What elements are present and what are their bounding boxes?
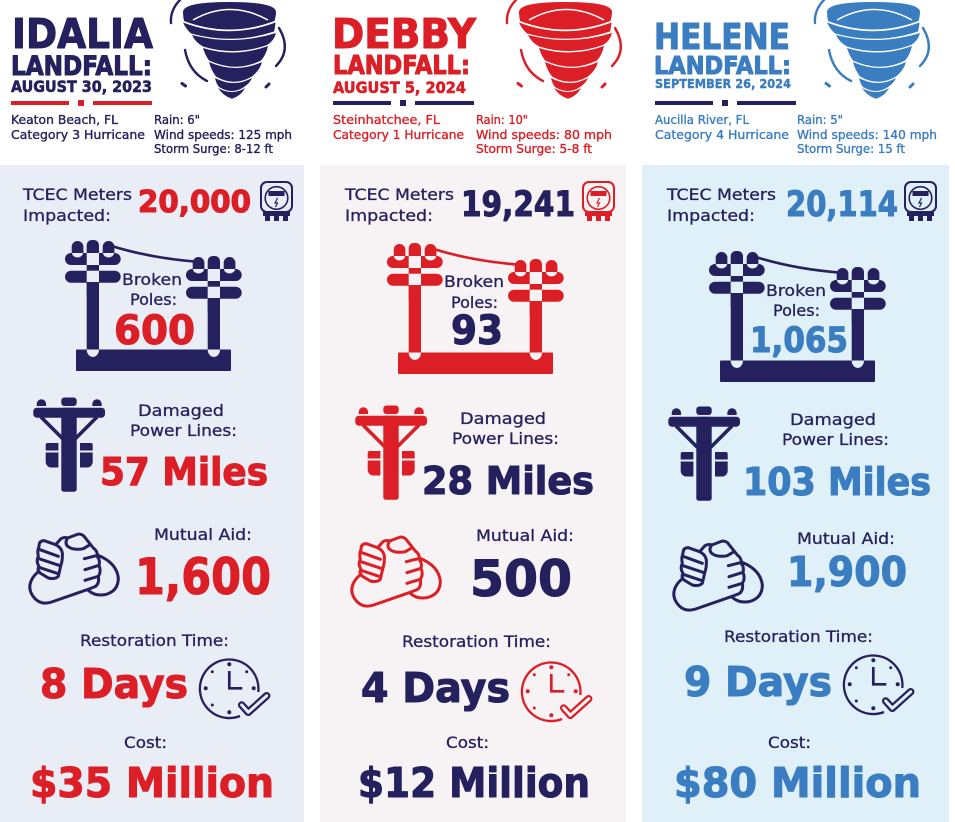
stat: meters impacted: TCEC Meters — [666, 185, 776, 204]
text: storm details: Category 1 Hurricane — [333, 128, 464, 142]
stat: cost: $35 Million — [30, 759, 274, 807]
heading: Idalia landfall: IDALIA — [12, 10, 153, 58]
stat: broken poles: Poles: — [451, 293, 498, 312]
text: storm details: Steinhatchee, FL — [333, 113, 440, 127]
text: storm details: Rain: 5" — [797, 113, 843, 127]
stat: broken poles — [444, 272, 504, 354]
stat: mutual aid — [787, 529, 907, 596]
text: storm details: Rain: 6" — [154, 113, 200, 127]
stat: meters impacted: TCEC Meters — [22, 185, 132, 204]
text: storm details: Storm Surge: 5-8 ft — [476, 142, 592, 156]
icon: tornado — [815, 0, 929, 99]
icon: clock — [522, 662, 589, 721]
stat: damaged power lines: Damaged — [138, 401, 224, 420]
text: storm details: Storm Surge: 8-12 ft — [154, 142, 273, 156]
stat: meters impacted: Impacted: — [23, 206, 111, 225]
icon: tornado — [507, 0, 621, 99]
icon: utility poles — [387, 243, 564, 374]
stat: restoration time — [684, 627, 873, 706]
stat: broken poles: 1,065 — [750, 321, 848, 361]
stat: meters impacted — [344, 185, 575, 225]
text: storm details — [333, 113, 612, 156]
text: storm details: Aucilla River, FL — [655, 113, 749, 127]
text: storm details: Rain: 10" — [476, 113, 528, 127]
icon: power line pole — [355, 406, 427, 500]
stat: restoration time: Restoration Time: — [80, 631, 229, 650]
divider rule — [333, 100, 474, 106]
stat: cost — [358, 733, 590, 807]
stat: mutual aid: 500 — [470, 550, 572, 608]
stat: broken poles — [750, 281, 848, 361]
stat: mutual aid: 1,900 — [787, 548, 907, 596]
heading: Idalia landfall: AUGUST 30, 2023 — [11, 77, 152, 96]
heading: Idalia landfall — [11, 10, 153, 96]
stat: broken poles: 93 — [451, 308, 503, 354]
stat: cost: Cost: — [124, 733, 167, 752]
stat: damaged power lines: Damaged — [790, 410, 876, 429]
column: Idalia — [0, 0, 304, 822]
column: Helene — [642, 0, 949, 822]
stat: meters impacted: Impacted: — [345, 206, 433, 225]
stat: meters impacted: Impacted: — [667, 206, 755, 225]
column: Debby — [320, 0, 626, 822]
icon: clock — [844, 655, 911, 714]
stat: meters impacted: TCEC Meters — [344, 185, 454, 204]
text: storm details: Wind speeds: 80 mph — [476, 128, 612, 142]
text: storm details: Wind speeds: 125 mph — [154, 128, 292, 142]
heading: Debby landfall — [332, 10, 477, 97]
heading: Helene landfall: SEPTEMBER 26, 2024 — [655, 76, 791, 91]
stat: broken poles: Broken — [122, 270, 182, 289]
icon: meter — [905, 182, 936, 221]
stat: damaged power lines: 103 Miles — [743, 460, 931, 504]
stat: broken poles: Poles: — [130, 290, 177, 309]
panel: Helene stats background — [642, 165, 949, 822]
stat: damaged power lines — [422, 409, 594, 503]
stat: broken poles: Broken — [444, 272, 504, 291]
stat: mutual aid: 1,600 — [135, 548, 271, 606]
panel: Debby stats background — [320, 165, 626, 822]
stat: cost — [674, 733, 921, 807]
stat: mutual aid: Mutual Aid: — [476, 526, 574, 545]
stat: cost: Cost: — [446, 733, 489, 752]
icon: power line pole — [668, 406, 740, 501]
icon: clock — [200, 659, 267, 718]
stat: damaged power lines — [100, 401, 268, 494]
divider rule — [11, 100, 152, 106]
text: storm details: Wind speeds: 140 mph — [797, 128, 937, 142]
stat: damaged power lines: Power Lines: — [782, 430, 889, 449]
stat: meters impacted: 20,114 — [786, 185, 898, 225]
heading: Helene landfall: LANDFALL: — [654, 51, 791, 80]
stat: cost: $80 Million — [674, 759, 921, 807]
stat: restoration time — [40, 631, 229, 708]
text: storm details — [655, 113, 937, 156]
divider rule — [655, 100, 796, 106]
heading: Helene landfall: HELENE — [654, 17, 790, 58]
stat: broken poles: Broken — [766, 281, 826, 300]
stat: broken poles — [114, 270, 195, 354]
stat: meters impacted — [22, 185, 251, 225]
stat: meters impacted — [666, 185, 898, 225]
stat: meters impacted: 19,241 — [461, 185, 575, 225]
icon: utility poles — [65, 240, 242, 371]
text: storm details: Storm Surge: 15 ft — [797, 142, 905, 156]
stat: restoration time: Restoration Time: — [402, 632, 551, 651]
stat: cost: $12 Million — [358, 759, 590, 807]
heading: Idalia landfall: LANDFALL: — [11, 51, 152, 82]
stat: cost: Cost: — [768, 733, 811, 752]
icon: utility poles — [709, 251, 886, 382]
stat: damaged power lines: Damaged — [460, 409, 546, 428]
panel: Idalia stats background — [0, 165, 304, 822]
icon: meter — [583, 182, 614, 221]
icon: handshake — [30, 534, 118, 603]
stat: broken poles: Poles: — [773, 301, 820, 320]
text: storm details: Category 4 Hurricane — [655, 128, 789, 142]
text: storm details — [11, 113, 292, 156]
icon: tornado — [171, 0, 285, 99]
stat: mutual aid: Mutual Aid: — [154, 525, 252, 544]
heading: Debby landfall: DEBBY — [332, 10, 477, 58]
stat: broken poles: 600 — [114, 308, 195, 354]
stat: restoration time: 4 Days — [361, 664, 510, 712]
stat: mutual aid — [135, 525, 271, 606]
stat: cost — [30, 733, 274, 807]
stat: damaged power lines: 57 Miles — [100, 450, 268, 494]
stat: damaged power lines: Power Lines: — [452, 429, 559, 448]
stat: restoration time: 9 Days — [684, 658, 832, 706]
icon: meter — [261, 182, 292, 221]
stat: damaged power lines: Power Lines: — [130, 421, 237, 440]
stat: damaged power lines: 28 Miles — [422, 459, 594, 503]
icon: power line pole — [33, 398, 105, 492]
stat: restoration time: Restoration Time: — [724, 627, 873, 646]
icon: handshake — [352, 537, 440, 606]
heading: Helene landfall — [654, 17, 791, 91]
stat: restoration time: 8 Days — [40, 660, 188, 708]
stat: restoration time — [361, 632, 551, 712]
heading: Debby landfall: LANDFALL: — [333, 51, 470, 81]
text: storm details: Keaton Beach, FL — [11, 113, 118, 127]
text: storm details: Category 3 Hurricane — [11, 128, 145, 142]
stat: mutual aid: Mutual Aid: — [797, 529, 895, 548]
stat: damaged power lines — [743, 410, 931, 504]
icon: handshake — [674, 541, 762, 610]
heading: Debby landfall: AUGUST 5, 2024 — [333, 78, 466, 97]
stat: meters impacted: 20,000 — [138, 185, 251, 220]
